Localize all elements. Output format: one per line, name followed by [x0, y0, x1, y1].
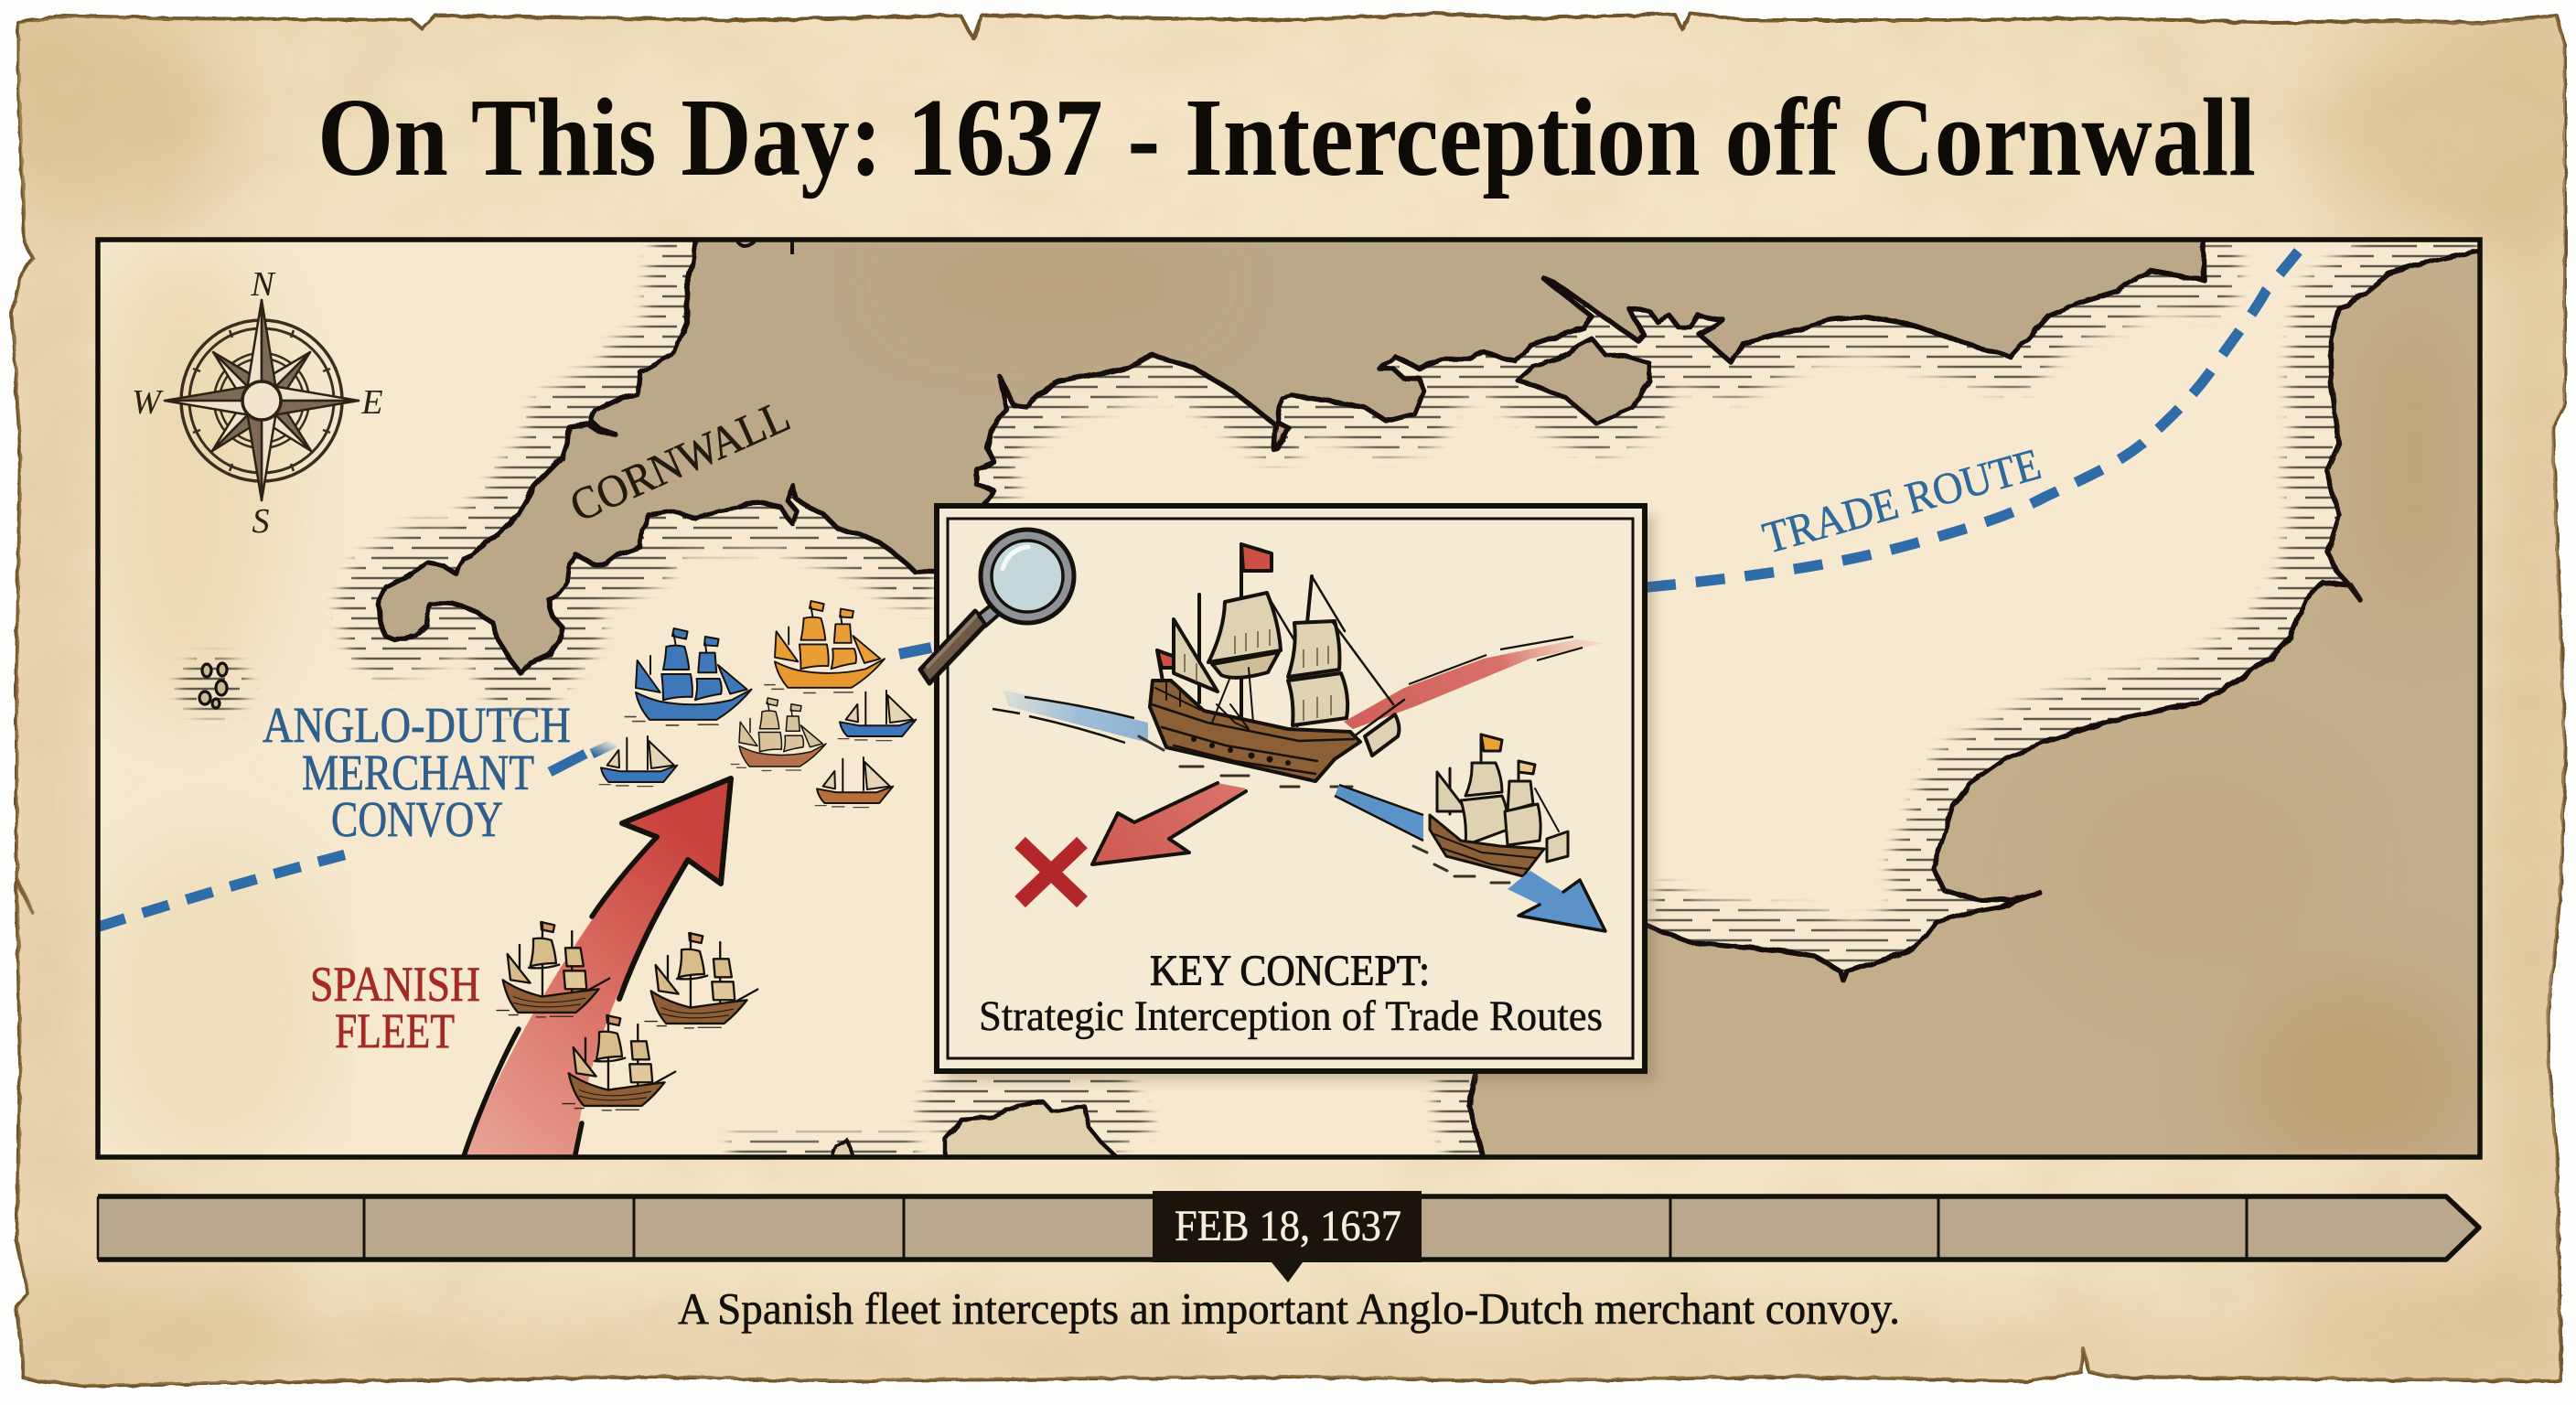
label: Spanish fleet: [310, 957, 480, 1058]
arrow: red doomed path: [1092, 783, 1246, 864]
trade route: west dashes: [99, 853, 353, 927]
compass rose: N: [250, 265, 276, 304]
arrow: blue escaping path head: [1508, 871, 1605, 931]
arrow: blue escaping path start: [1335, 785, 1423, 841]
label: Spanish fleet: FLEET: [335, 1003, 455, 1058]
land: small rock: [831, 1140, 854, 1160]
inset text: key concept: KEY CONCEPT:: [1150, 947, 1430, 995]
icon: magnifying glass: [920, 530, 1074, 683]
land colour staining: [896, 247, 2474, 1180]
label: Anglo-Dutch merchant convoy: ANGLO-DUTCH: [263, 697, 571, 753]
label: Anglo-Dutch merchant convoy: [263, 697, 571, 847]
small islets off the north edge: [736, 240, 792, 254]
label: trade route: TRADE ROUTE: [1757, 438, 2046, 563]
map frame: [98, 240, 2480, 1157]
ship: Spanish vessel one: [497, 922, 609, 1017]
panel: map: [82, 233, 2488, 1180]
inset text: strategic interception: Strategic Interception of Trade Routes: [979, 992, 1603, 1040]
label: Anglo-Dutch merchant convoy: CONVOY: [331, 791, 503, 847]
land: Channel island: [945, 1101, 1122, 1162]
ship: blue convoy galleon: [625, 628, 752, 725]
ship: Spanish vessel two: [645, 933, 757, 1028]
label: Cornwall: CORNWALL: [563, 390, 797, 531]
land: France: [1469, 249, 2488, 1162]
ship: orange convoy galleon: [765, 601, 885, 692]
compass rose: E: [360, 383, 383, 422]
title: On This Day: 1637 - Interception off Cornwall: [317, 76, 2256, 199]
galleon: main Spanish ship: [1139, 544, 1404, 787]
trade route fragments near convoy: [550, 648, 931, 772]
date marker: [1153, 1191, 1422, 1282]
trade route: east dashes: [1647, 251, 2299, 587]
ship: escaping merchant: [1413, 735, 1568, 883]
inset card: [937, 506, 1645, 1071]
land: Isle of Wight: [1518, 338, 1649, 424]
label: Spanish fleet: SPANISH: [310, 957, 480, 1012]
faded blue convoy track: [993, 691, 1148, 743]
compass rose: S: [252, 502, 269, 541]
ship: blue sloop right: [838, 691, 916, 741]
land masses: [378, 233, 2488, 1162]
ship: blue sloop left: [599, 736, 677, 787]
icon: red cross: [1020, 842, 1082, 902]
compass rose: [132, 265, 383, 541]
land: Cornwall and south coast of England: [378, 233, 2204, 674]
timeline bar: [98, 1191, 2479, 1282]
compass rose: W: [132, 383, 164, 422]
caption: A Spanish fleet intercepts an important Anglo-Dutch merchant convoy.: [678, 1283, 1900, 1334]
arrow: Spanish advance: [464, 778, 731, 1156]
label: Anglo-Dutch merchant convoy: MERCHANT: [302, 745, 534, 800]
ship: brown convoy galleon: [731, 698, 826, 770]
ship: Spanish vessel three: [563, 1015, 675, 1110]
panel: key concept inset: [920, 506, 1654, 1080]
icon: Isles of Scilly: [199, 663, 227, 708]
inset shadow: [946, 515, 1654, 1080]
map sea background: [98, 240, 2480, 1157]
date marker: FEB 18, 1637: [1175, 1202, 1401, 1250]
ship: brown sloop: [815, 757, 893, 808]
faded red track: [1344, 637, 1605, 729]
coastal hatching: [98, 240, 2480, 1157]
